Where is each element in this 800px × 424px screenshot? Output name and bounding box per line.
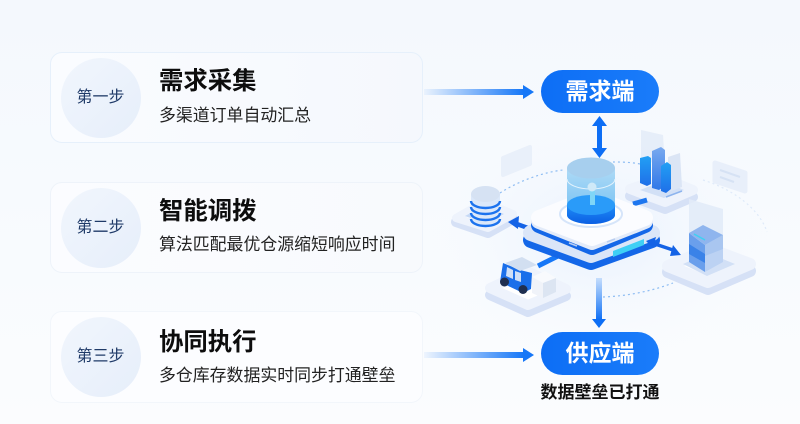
pill: demand side	[541, 70, 659, 113]
panel: step 3	[50, 311, 423, 403]
faded floating cards	[503, 147, 745, 191]
icon: delivery truck	[500, 257, 556, 298]
pill: supply side	[541, 332, 659, 375]
icon: stacked blocks	[689, 199, 723, 272]
description 2: 算法匹配最优仓源缩短响应时间	[159, 235, 395, 254]
arrow: hub to database	[508, 216, 528, 229]
data cylinder	[567, 158, 615, 224]
heading 3: 协同执行	[159, 329, 257, 356]
step badge 1	[61, 58, 141, 138]
panel: step 2	[50, 182, 423, 273]
pill: demand side: 需求端	[566, 78, 634, 104]
central hub platform	[531, 197, 652, 262]
step badge 1: 第一步	[76, 89, 124, 106]
step badge 3	[61, 317, 141, 397]
arrow: step 3 to supply side	[424, 348, 534, 362]
arrow: hub to warehouse (two-way)	[646, 237, 681, 256]
platform: bar chart	[630, 130, 693, 209]
arrow: chart to hub	[633, 200, 647, 204]
description 1: 多渠道订单自动汇总	[159, 106, 311, 125]
arrow: hub to truck	[538, 256, 558, 266]
icon: database stack	[471, 186, 500, 227]
step badge 2	[61, 188, 141, 268]
pill: supply side: 供应端	[566, 340, 634, 366]
heading 2: 智能调拨	[159, 198, 257, 225]
heading 1: 需求采集	[159, 68, 257, 95]
step badge 3: 第三步	[76, 348, 124, 365]
platform: truck	[490, 256, 566, 312]
platform: database	[456, 186, 513, 233]
step badge 2: 第二步	[76, 219, 124, 236]
bar chart	[640, 130, 682, 197]
description 3: 多仓库存数据实时同步打通壁垒	[159, 366, 395, 385]
arrow: demand side to hub (two-way)	[592, 116, 607, 158]
panel: step 1	[50, 52, 423, 143]
platform: warehouse blocks	[668, 199, 750, 289]
arrow: step 1 to demand side	[424, 85, 534, 99]
caption: 数据壁垒已打通	[540, 383, 660, 402]
dotted orbit ring	[500, 162, 767, 297]
arrow: hub to supply side	[592, 278, 606, 328]
